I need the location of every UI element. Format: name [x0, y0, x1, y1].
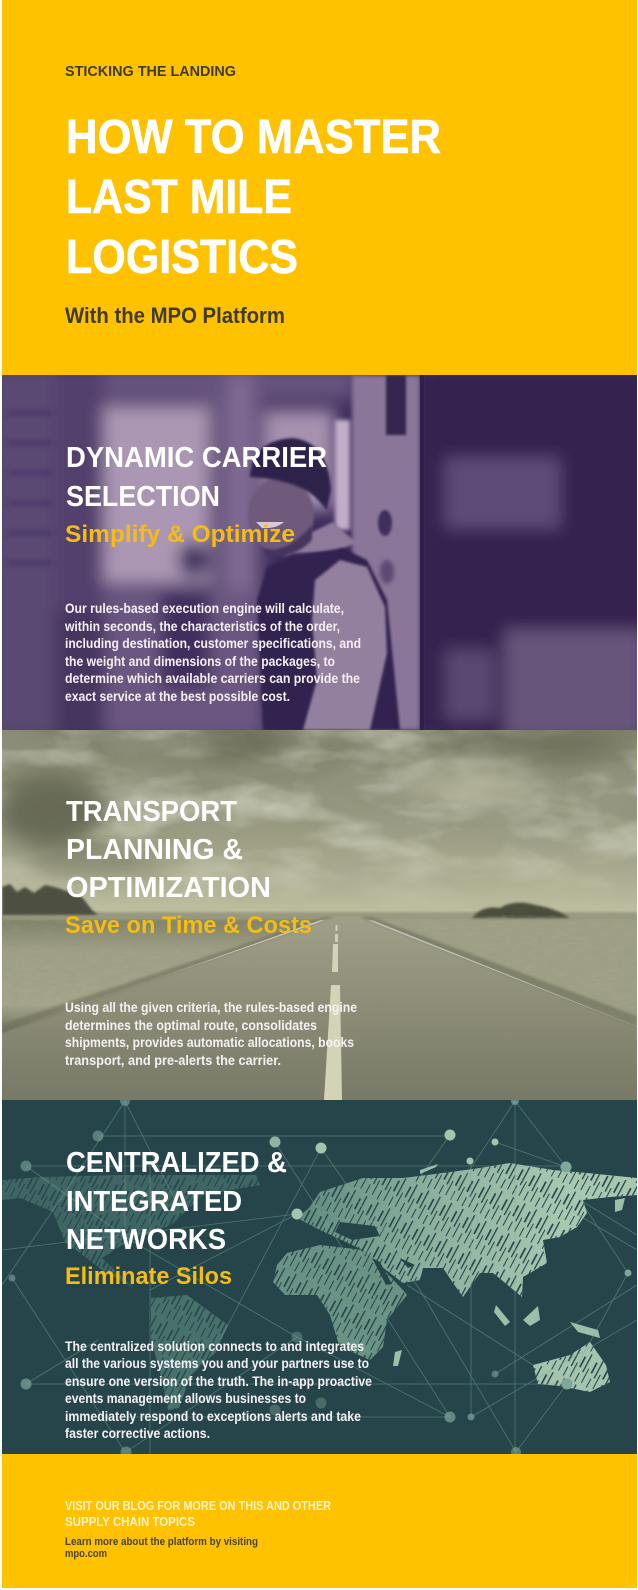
panel: centralized and integrated networks: [2, 1096, 637, 1458]
footer link text: [65, 1536, 258, 1560]
subheading: Save on Time & Costs: [65, 912, 312, 939]
body text: [65, 999, 357, 1068]
worker figure: [248, 438, 400, 730]
eyebrow label: STICKING THE LANDING: [65, 64, 236, 80]
body text: all the various systems you and your partners use to: [65, 1355, 369, 1371]
footer call to action: SUPPLY CHAIN TOPICS: [65, 1514, 195, 1529]
body text: Using all the given criteria, the rules-based engine: [65, 999, 357, 1015]
body text: Our rules-based execution engine will calculate,: [65, 600, 344, 616]
body text: immediately respond to exceptions alerts and take: [65, 1408, 361, 1424]
body text: ensure one version of the truth. The in-app proactive: [65, 1373, 372, 1389]
body text: transport, and pre-alerts the carrier.: [65, 1052, 281, 1068]
main title: LAST MILE: [66, 171, 292, 224]
main title: [66, 111, 441, 284]
panel: footer: [2, 1454, 637, 1588]
heading: TRANSPORT: [66, 796, 237, 828]
heading: NETWORKS: [66, 1224, 226, 1256]
subheading: Eliminate Silos: [65, 1263, 232, 1290]
panel: dynamic carrier selection: [0, 365, 638, 740]
footer call to action: VISIT OUR BLOG FOR MORE ON THIS AND OTHER: [65, 1498, 332, 1513]
distant bush: [472, 903, 570, 918]
heading: OPTIMIZATION: [66, 872, 271, 904]
heading: INTEGRATED: [66, 1186, 242, 1218]
body text: within seconds, the characteristics of the order,: [64, 618, 340, 634]
heading: PLANNING &: [66, 834, 243, 866]
heading: CENTRALIZED &: [66, 1147, 287, 1179]
map seas: [335, 1222, 415, 1285]
body text: The centralized solution connects to and integrates: [65, 1338, 364, 1354]
body text: [65, 1338, 372, 1441]
body text: including destination, customer specifications, and: [65, 635, 361, 651]
footer call to action: [65, 1498, 332, 1529]
panel: transport planning and optimization: [0, 730, 638, 1100]
heading: SELECTION: [66, 481, 220, 513]
body text: determine which available carriers can provide the: [65, 670, 360, 686]
body text: events management allows businesses to: [65, 1390, 306, 1406]
body text: the weight and dimensions of the packages, to: [65, 653, 335, 669]
body text: shipments, provides automatic allocations, books: [65, 1034, 354, 1050]
main title: HOW TO MASTER: [66, 111, 441, 164]
heading: [66, 446, 326, 506]
photo: empty road through fields: [0, 730, 638, 1100]
network lines and nodes: [2, 1096, 637, 1458]
footer link text: Learn more about the platform by visiting: [65, 1536, 258, 1548]
tree line: [2, 884, 98, 915]
subtitle: With the MPO Platform: [65, 303, 285, 328]
heading: [66, 800, 270, 898]
body text: determines the optimal route, consolidates: [65, 1017, 317, 1033]
photo: delivery worker in a warehouse: [0, 365, 638, 740]
subheading: Simplify & Optimize: [65, 521, 295, 548]
body text: faster corrective actions.: [65, 1425, 210, 1441]
panel: header: [2, 0, 637, 375]
world map: [2, 1163, 637, 1410]
body text: exact service at the best possible cost.: [65, 688, 290, 704]
heading: [67, 1152, 286, 1250]
heading: DYNAMIC CARRIER: [66, 442, 327, 474]
main title: LOGISTICS: [66, 231, 298, 284]
footer link text: mpo.com: [65, 1548, 107, 1560]
map hatch texture: [2, 1163, 637, 1410]
body text: [64, 600, 361, 704]
